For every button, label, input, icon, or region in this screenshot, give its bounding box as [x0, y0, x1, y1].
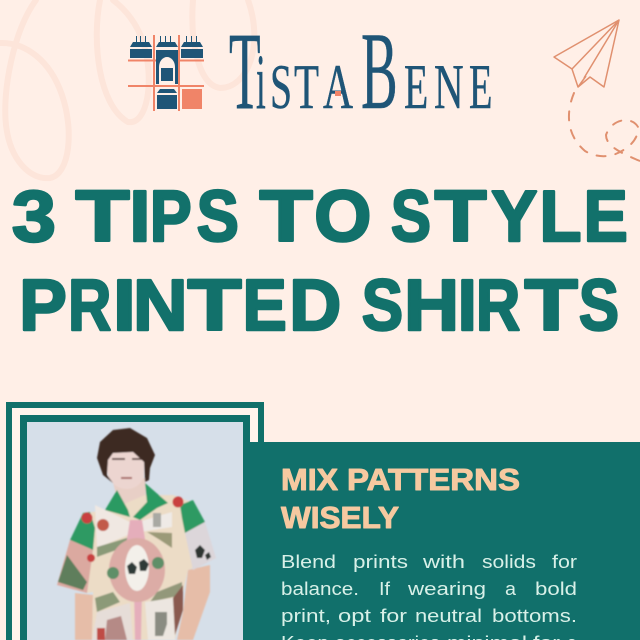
tip heading: WISELY [281, 500, 399, 535]
panel: tip 1 [245, 442, 640, 640]
tip body text: wearing [407, 579, 486, 599]
title: S [579, 266, 619, 346]
title: R [476, 266, 520, 346]
logo wordmark: B [361, 11, 398, 132]
tip body text: solids [482, 552, 536, 572]
icon: paper plane [554, 20, 640, 161]
face [105, 450, 144, 489]
tip heading: MIX [281, 462, 338, 497]
tip body text [281, 552, 578, 640]
tip heading: PATTERNS [347, 462, 520, 497]
arms [75, 565, 210, 640]
tip body text: neutral [415, 606, 482, 626]
title: T [525, 265, 578, 345]
title: I [129, 175, 150, 256]
tip body text: a [505, 579, 517, 599]
title: P [19, 265, 67, 346]
title: N [133, 264, 188, 345]
logo wordmark: T [294, 51, 319, 122]
collar [105, 483, 168, 520]
tip body text: for [380, 606, 407, 626]
photo: man in printed shirt [27, 422, 243, 640]
title: H [404, 265, 459, 345]
logo wordmark: A [323, 51, 353, 122]
logo wordmark: S [270, 52, 292, 122]
tip body text: with [422, 552, 465, 572]
title: 3 [12, 176, 56, 257]
tip body text: opt [338, 606, 371, 626]
logo wordmark: N [434, 51, 464, 122]
title: T [76, 177, 130, 257]
title: P [150, 177, 192, 257]
title: T [188, 266, 242, 346]
title: T [260, 176, 313, 256]
tip body text: Blend [281, 552, 336, 572]
title: R [68, 266, 111, 346]
title: Y [491, 175, 537, 256]
panel: photo frame [6, 402, 264, 640]
title: S [197, 177, 239, 257]
title: T [435, 176, 487, 256]
tip body text: bottoms. [492, 606, 577, 626]
title: I [458, 264, 477, 345]
logo: TistaBene [128, 9, 492, 132]
tip body text: If [379, 579, 391, 599]
tip body text: balance. [281, 579, 359, 599]
title: E [584, 175, 628, 256]
title [12, 175, 628, 346]
title: I [113, 266, 136, 346]
tip heading [281, 462, 520, 535]
logo icon: towers [128, 35, 204, 111]
decorative swirl [0, 0, 254, 178]
neck [112, 478, 146, 520]
tip body text: bold [535, 579, 577, 599]
logo wordmark: E [404, 52, 428, 122]
tip body text: print, [281, 606, 331, 626]
hair [97, 428, 155, 483]
shirt print [57, 496, 216, 640]
tip body text: prints [353, 552, 408, 572]
title: L [539, 175, 581, 256]
title: O [314, 176, 371, 257]
title: S [391, 177, 431, 257]
logo wordmark: i [256, 40, 266, 126]
shirt base [57, 495, 216, 640]
tip body text: for [552, 552, 577, 572]
title: E [243, 264, 287, 345]
logo wordmark [229, 9, 492, 132]
title: D [289, 266, 341, 346]
logo wordmark: T [229, 9, 261, 132]
title: S [362, 265, 403, 346]
logo wordmark: E [469, 52, 492, 123]
